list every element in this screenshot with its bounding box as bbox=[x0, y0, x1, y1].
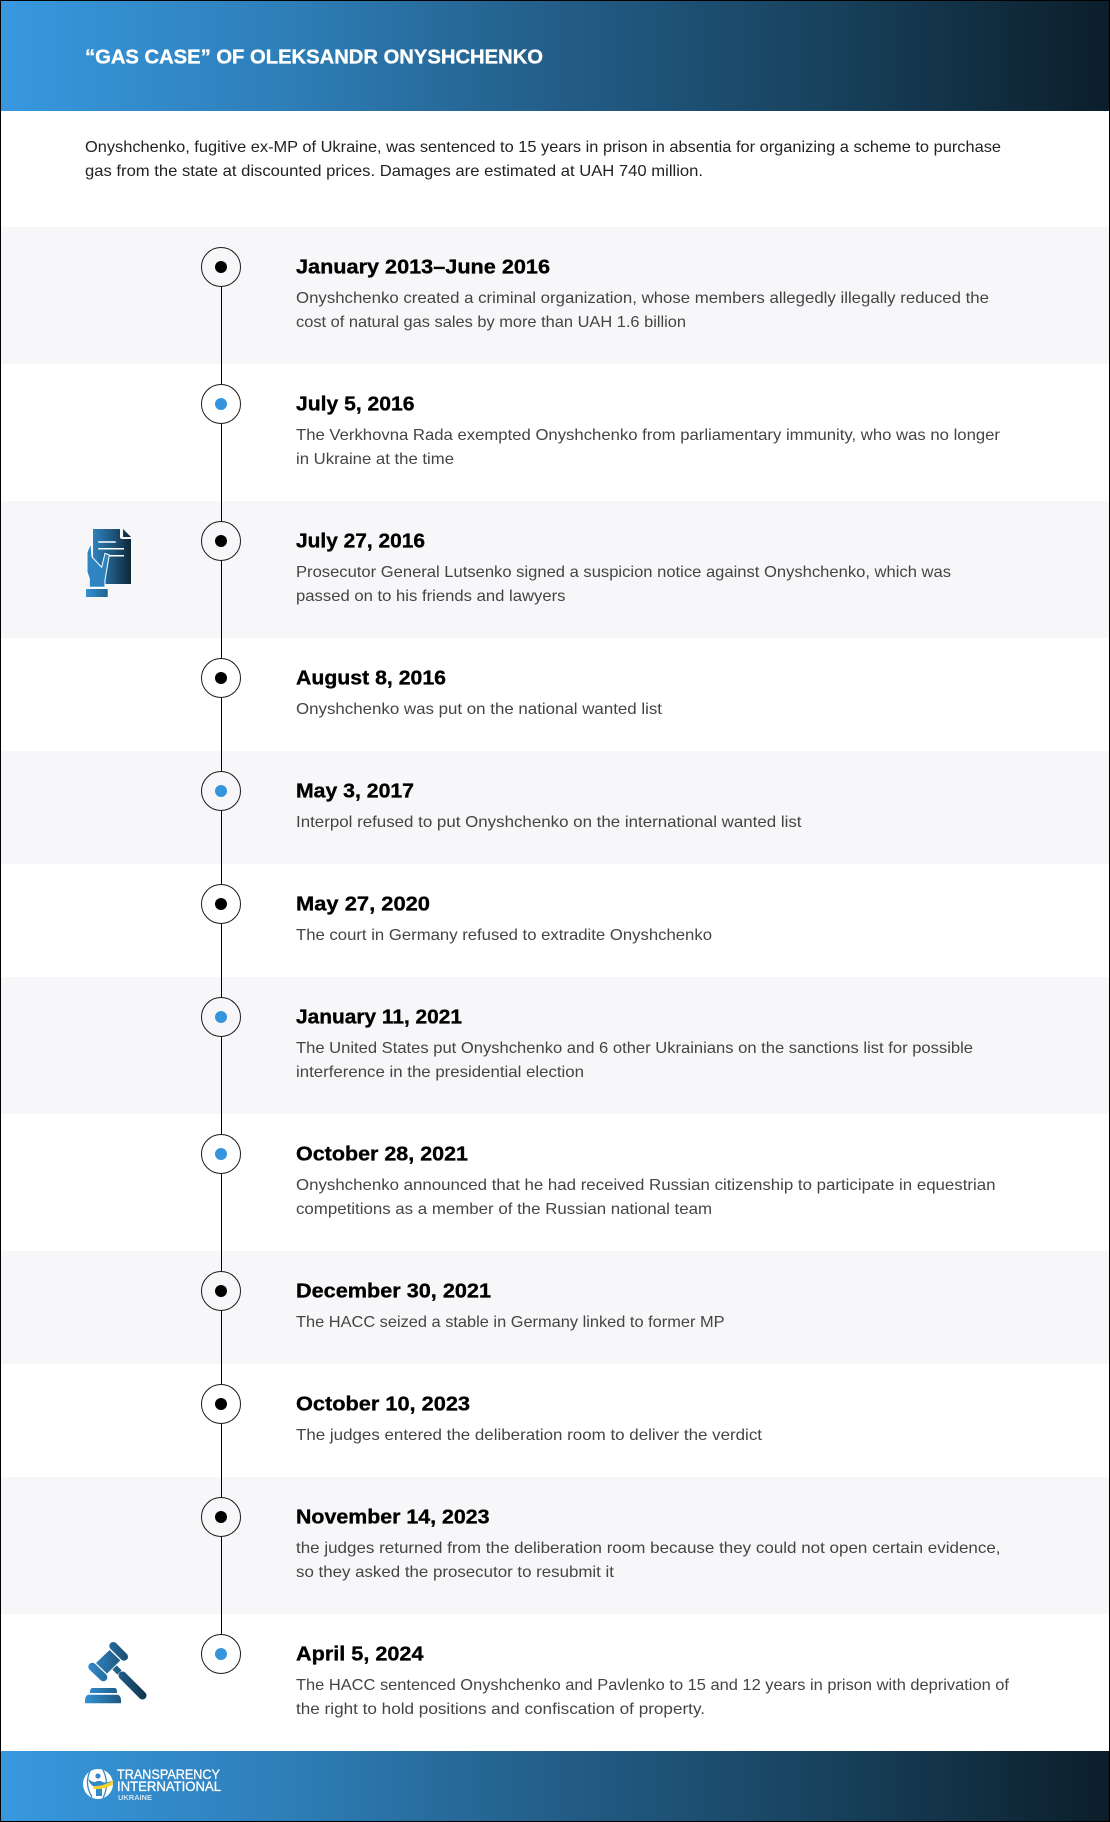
description: Onyshchenko was put on the national wanted list bbox=[296, 701, 663, 718]
description: The Verkhovna Rada exempted Onyshchenko from parliamentary immunity, who was no longer bbox=[296, 427, 1000, 444]
row backgrounds bbox=[0, 227, 1110, 1614]
marker bbox=[202, 998, 240, 1036]
event: August 8, 2016 bbox=[202, 658, 663, 718]
description: the right to hold positions and confiscation of property. bbox=[296, 1701, 705, 1718]
logo wordmark: INTERNATIONAL bbox=[117, 1779, 221, 1794]
event: December 30, 2021 bbox=[202, 1272, 724, 1331]
marker bbox=[202, 884, 240, 924]
intro text bbox=[85, 139, 1001, 180]
description bbox=[296, 564, 951, 605]
description: Prosecutor General Lutsenko signed a suspicion notice against Onyshchenko, which was bbox=[296, 564, 951, 581]
description: The court in Germany refused to extradite Onyshchenko bbox=[296, 927, 712, 944]
description bbox=[296, 1040, 973, 1081]
event: January 11, 2021 bbox=[202, 998, 973, 1081]
event: May 27, 2020 bbox=[202, 884, 712, 944]
date: December 30, 2021 bbox=[296, 1280, 491, 1303]
description bbox=[296, 290, 989, 331]
marker bbox=[202, 1384, 240, 1424]
event: July 5, 2016 bbox=[202, 384, 1000, 468]
description: in Ukraine at the time bbox=[296, 451, 454, 468]
date: November 14, 2023 bbox=[296, 1506, 490, 1529]
date: August 8, 2016 bbox=[296, 667, 446, 690]
marker bbox=[202, 1272, 240, 1310]
marker bbox=[202, 1498, 240, 1536]
logo wordmark bbox=[117, 1767, 221, 1802]
description: the judges returned from the deliberation room because they could not open certain evidence, bbox=[296, 1540, 1000, 1557]
logo wordmark: UKRAINE bbox=[118, 1795, 152, 1802]
description: The judges entered the deliberation room to deliver the verdict bbox=[296, 1427, 763, 1444]
date: January 11, 2021 bbox=[296, 1006, 462, 1029]
footer banner bbox=[0, 1751, 1110, 1822]
intro text: gas from the state at discounted prices. Damages are estimated at UAH 740 million. bbox=[85, 163, 703, 180]
description: interference in the presidential election bbox=[296, 1064, 584, 1081]
intro text: Onyshchenko, fugitive ex-MP of Ukraine, was sentenced to 15 years in prison in absentia for organizing a scheme to purchase bbox=[85, 139, 1001, 156]
logo: Transparency International Ukraine bbox=[83, 1767, 221, 1802]
description: The United States put Onyshchenko and 6 other Ukrainians on the sanctions list for possible bbox=[296, 1040, 973, 1057]
marker bbox=[202, 1634, 240, 1674]
description: The HACC seized a stable in Germany linked to former MP bbox=[296, 1314, 724, 1331]
description: cost of natural gas sales by more than UAH 1.6 billion bbox=[296, 314, 686, 331]
timeline line bbox=[220, 267, 222, 1654]
event: October 28, 2021 bbox=[202, 1134, 996, 1218]
marker bbox=[202, 658, 240, 698]
description: Interpol refused to put Onyshchenko on the international wanted list bbox=[296, 814, 802, 831]
logo wordmark: TRANSPARENCY bbox=[117, 1767, 220, 1782]
icon: judge gavel bbox=[85, 1646, 142, 1703]
marker bbox=[202, 1134, 240, 1174]
description: passed on to his friends and lawyers bbox=[296, 588, 566, 605]
description bbox=[296, 427, 1000, 468]
logo globe bbox=[83, 1769, 113, 1799]
description: so they asked the prosecutor to resubmit it bbox=[296, 1564, 615, 1581]
description: competitions as a member of the Russian national team bbox=[296, 1201, 712, 1218]
description: Onyshchenko created a criminal organization, whose members allegedly illegally reduced the bbox=[296, 290, 989, 307]
marker bbox=[202, 772, 240, 810]
event: July 27, 2016 bbox=[202, 522, 951, 605]
description: The HACC sentenced Onyshchenko and Pavlenko to 15 and 12 years in prison with deprivation of bbox=[296, 1677, 1010, 1694]
date: May 3, 2017 bbox=[296, 780, 414, 803]
event: October 10, 2023 bbox=[202, 1384, 763, 1444]
date: April 5, 2024 bbox=[296, 1643, 424, 1666]
marker bbox=[202, 522, 240, 560]
date: October 10, 2023 bbox=[296, 1393, 470, 1416]
event: November 14, 2023 bbox=[202, 1498, 1000, 1581]
date: July 5, 2016 bbox=[296, 393, 414, 416]
title: “GAS CASE” OF OLEKSANDR ONYSHCHENKO bbox=[85, 46, 543, 68]
event: January 2013–June 2016 bbox=[202, 248, 989, 331]
date: January 2013–June 2016 bbox=[296, 256, 550, 279]
marker bbox=[202, 384, 240, 424]
date: May 27, 2020 bbox=[296, 893, 430, 916]
date: October 28, 2021 bbox=[296, 1143, 468, 1166]
date: July 27, 2016 bbox=[296, 530, 425, 553]
description bbox=[296, 1540, 1000, 1581]
description bbox=[296, 1177, 996, 1218]
marker bbox=[202, 248, 240, 286]
description: Onyshchenko announced that he had received Russian citizenship to participate in equestrian bbox=[296, 1177, 996, 1194]
header banner bbox=[0, 0, 1110, 111]
description bbox=[296, 1677, 1010, 1718]
event: May 3, 2017 bbox=[202, 772, 802, 831]
event: April 5, 2024 bbox=[202, 1634, 1010, 1718]
icon: hand holding document bbox=[86, 529, 131, 597]
